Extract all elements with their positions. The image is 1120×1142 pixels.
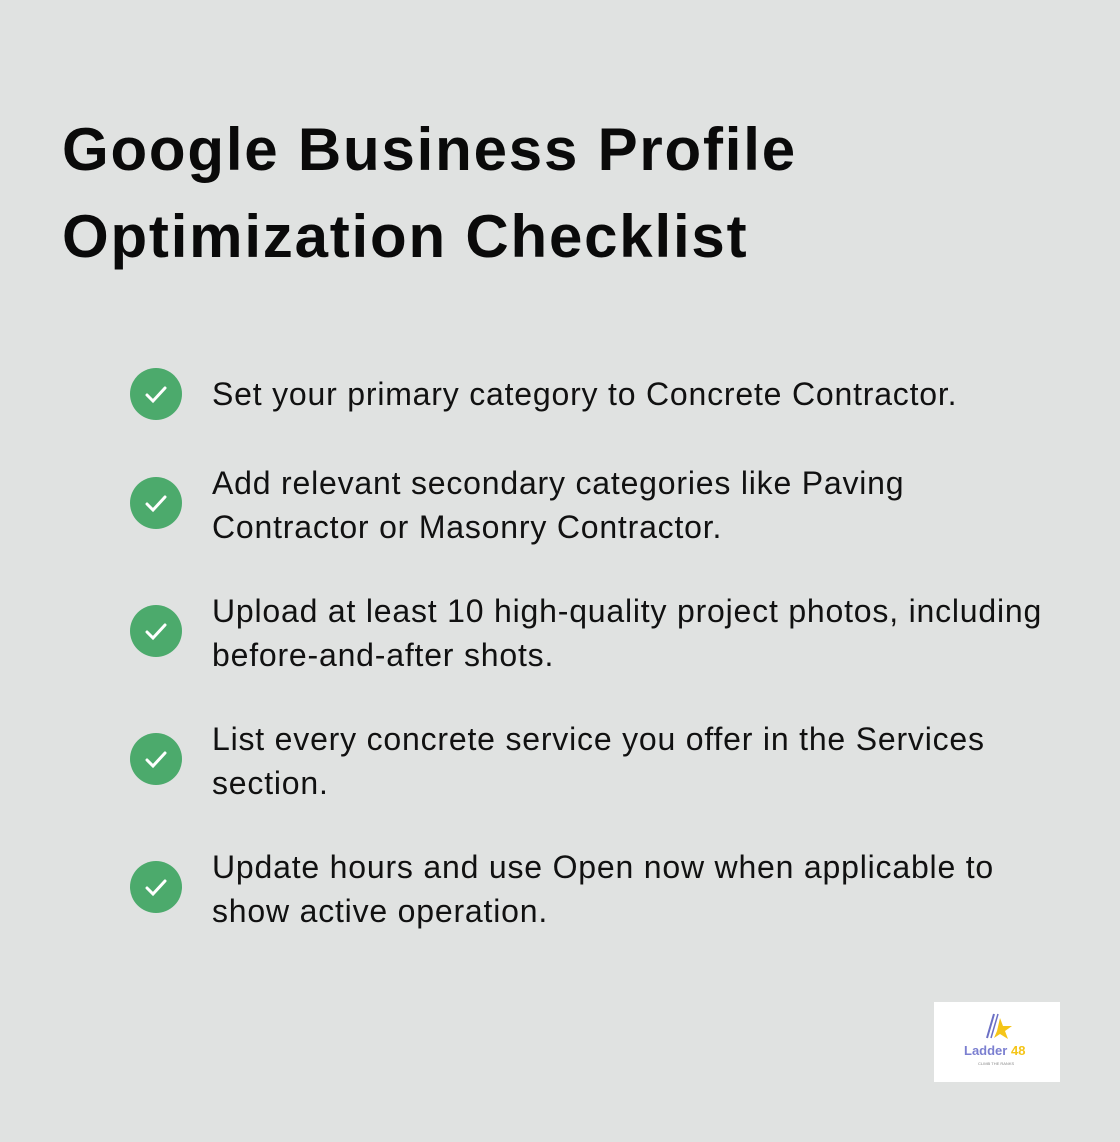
text 3: Upload at least 10 high-quality project photos, including [212, 593, 1042, 629]
text 5: Update hours and use Open now when applicable to [212, 849, 994, 885]
text 1: Set your primary category to Concrete Contractor. [212, 376, 957, 412]
text 5 [212, 849, 994, 929]
logo [934, 1002, 1060, 1082]
icon: check 1 [130, 368, 182, 420]
text 3: before-and-after shots. [212, 637, 554, 673]
icon: check 3 [130, 605, 182, 657]
text 2: Contractor or Masonry Contractor. [212, 509, 722, 545]
logo: CLIMB THE RANKS [978, 1061, 1014, 1066]
icon: check 2 [130, 477, 182, 529]
text 4: List every concrete service you offer in the Services [212, 721, 985, 757]
text 4 [212, 721, 985, 801]
item 1 [130, 368, 957, 420]
text 2: Add relevant secondary categories like Paving [212, 465, 904, 501]
text 5: show active operation. [212, 893, 548, 929]
text 2 [212, 465, 904, 545]
icon: check 4 [130, 733, 182, 785]
text 3 [212, 593, 1042, 673]
title: Google Business Profile [62, 116, 797, 183]
item 3 [130, 593, 1042, 673]
logo: Ladder 48 [964, 1043, 1025, 1058]
item 2 [130, 465, 904, 545]
item 4 [130, 721, 985, 801]
text 4: section. [212, 765, 329, 801]
item 5 [130, 849, 994, 929]
icon: check 5 [130, 861, 182, 913]
title [62, 116, 797, 270]
title: Optimization Checklist [62, 203, 748, 270]
